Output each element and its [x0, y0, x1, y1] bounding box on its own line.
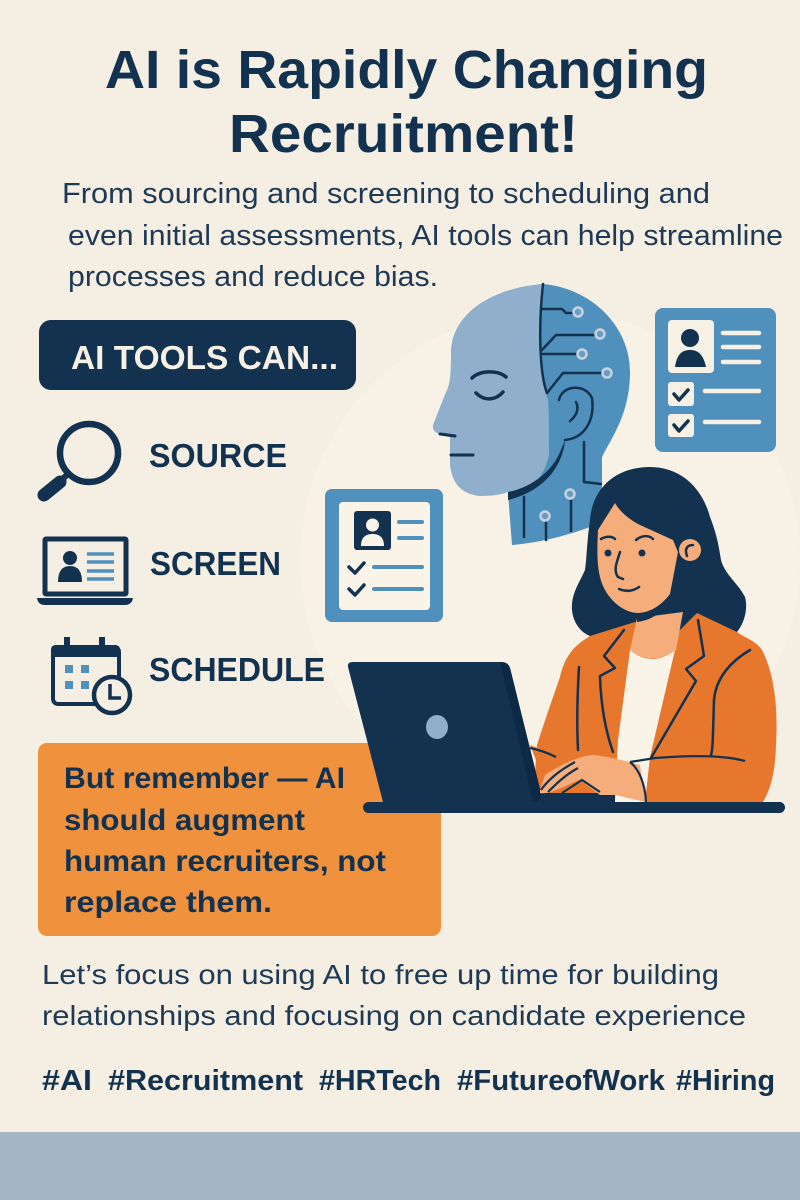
- hashtags: [42, 1065, 775, 1097]
- hashtags: #Hiring: [676, 1065, 775, 1097]
- hashtags: #FutureofWork: [457, 1065, 666, 1097]
- intro paragraph: even initial assessments, AI tools can help streamline: [68, 220, 783, 252]
- title: Recruitment!: [229, 104, 578, 164]
- callout: orange reminder box: replace them.: [64, 886, 272, 919]
- illustration: woman at laptop: [348, 467, 785, 813]
- closing statement: Let’s focus on using AI to free up time for building: [42, 959, 719, 990]
- hashtags: #Recruitment: [108, 1065, 303, 1097]
- closing statement: [42, 959, 746, 1031]
- icon: calendar with clock: [51, 637, 130, 713]
- heading pill: AI tools can: [39, 320, 356, 390]
- intro paragraph: [62, 178, 783, 293]
- footer band: [0, 1132, 800, 1200]
- label: screen: SCREEN: [150, 545, 281, 582]
- callout: orange reminder box: [38, 743, 441, 936]
- card: candidate profile left: [325, 489, 443, 622]
- label: schedule: SCHEDULE: [149, 651, 325, 688]
- intro paragraph: processes and reduce bias.: [68, 261, 438, 293]
- illustration: AI head: [433, 284, 630, 545]
- intro paragraph: From sourcing and screening to scheduling and: [62, 178, 710, 210]
- icon: magnifying glass: [44, 424, 118, 495]
- closing statement: relationships and focusing on candidate experience: [42, 1000, 746, 1031]
- title: [105, 40, 708, 164]
- laptop: [348, 662, 615, 802]
- hashtags: #AI: [42, 1065, 92, 1097]
- callout: orange reminder box: human recruiters, not: [64, 845, 386, 878]
- heading pill: AI tools can: AI TOOLS CAN...: [71, 339, 338, 376]
- card: candidate profile right: [655, 308, 776, 452]
- callout: orange reminder box: But remember — AI: [64, 762, 345, 795]
- hands: [530, 745, 745, 802]
- title: AI is Rapidly Changing: [105, 40, 708, 100]
- hashtags: #HRTech: [319, 1065, 441, 1097]
- icon: laptop with profile: [37, 539, 133, 605]
- callout: orange reminder box: should augment: [64, 804, 305, 837]
- label: source: SOURCE: [149, 437, 287, 474]
- desk: [363, 802, 785, 813]
